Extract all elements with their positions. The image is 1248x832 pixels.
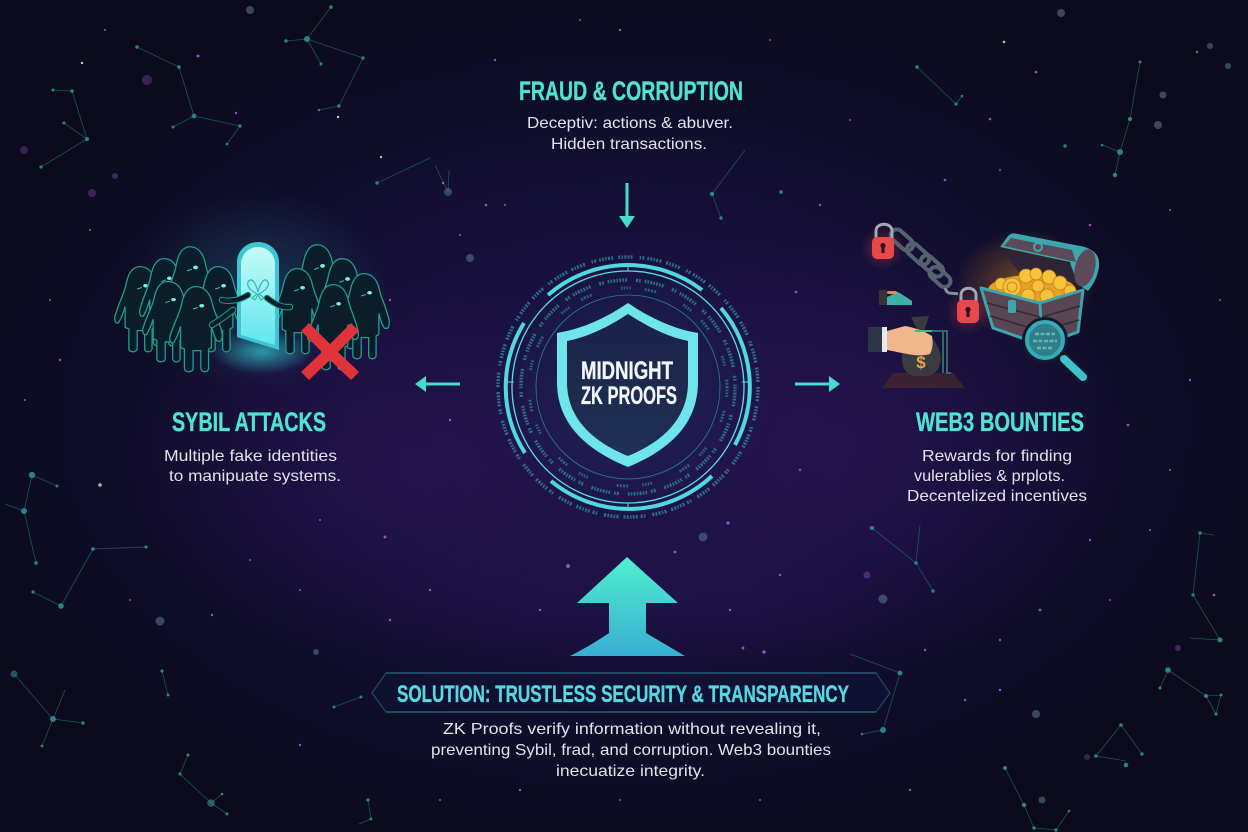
text: sybil description: to manipuate systems. bbox=[169, 468, 341, 485]
magnifier bbox=[1022, 317, 1083, 377]
hand and money bag: $ bbox=[916, 353, 926, 372]
text: solution description: ZK Proofs verify information without revealing it, bbox=[443, 721, 821, 738]
text: fraud description: Hidden transactions. bbox=[551, 136, 707, 153]
red cross bbox=[301, 323, 359, 380]
text: solution description: preventing Sybil, frad, and corruption. Web3 bounties bbox=[431, 742, 831, 759]
rings: code dots bbox=[498, 257, 758, 517]
shield label: MIDNIGHT bbox=[581, 357, 673, 385]
lock one bbox=[872, 224, 894, 259]
text: fraud description bbox=[527, 115, 733, 153]
door bbox=[237, 242, 279, 350]
shield bbox=[557, 303, 698, 467]
text: fraud description: Deceptiv: actions & abuver. bbox=[527, 115, 733, 132]
text: bounties description: Rewards for finding bbox=[922, 448, 1072, 465]
shield label: ZK PROOFS bbox=[581, 382, 677, 410]
heading: web3 bounties: WEB3 BOUNTIES bbox=[916, 407, 1084, 437]
text: solution description: inecuatize integrity. bbox=[556, 763, 705, 780]
arrow: left to sybil bbox=[415, 376, 460, 392]
chest lid bbox=[1000, 233, 1099, 291]
text: sybil description bbox=[164, 448, 341, 485]
text: bounties description: vulerablies & prplots. bbox=[914, 468, 1065, 485]
arrow: large up arrow bbox=[570, 557, 685, 656]
text: bounties description bbox=[907, 448, 1087, 505]
icon: zk shield with rings bbox=[488, 247, 768, 527]
heading: solution: SOLUTION: TRUSTLESS SECURITY & TRANSPARENCY bbox=[397, 681, 849, 708]
banner: solution bbox=[372, 673, 890, 712]
door symbol bbox=[248, 280, 268, 300]
rings: thick arcs bbox=[505, 263, 751, 511]
chest body bbox=[981, 288, 1083, 345]
arrow: right to bounties bbox=[795, 376, 840, 392]
chain bbox=[888, 227, 958, 294]
lock two bbox=[957, 288, 979, 323]
icon: sybil attackers at door bbox=[115, 190, 389, 390]
coins bbox=[988, 275, 1076, 305]
text: bounties description: Decentelized incentives bbox=[907, 488, 1087, 505]
text: solution description bbox=[431, 721, 831, 780]
heading: sybil attacks: SYBIL ATTACKS bbox=[172, 407, 326, 437]
small teal device bbox=[879, 290, 912, 305]
arrow: down to shield bbox=[619, 183, 635, 228]
reaching hands bbox=[212, 295, 290, 325]
icon: web3 bounties bbox=[861, 224, 1099, 388]
shield label bbox=[581, 357, 677, 410]
treasure chest bbox=[981, 233, 1099, 345]
heading: fraud and corruption: FRAUD & CORRUPTION bbox=[519, 76, 743, 106]
hand and money bag bbox=[868, 316, 965, 388]
text: sybil description: Multiple fake identities bbox=[164, 448, 337, 465]
